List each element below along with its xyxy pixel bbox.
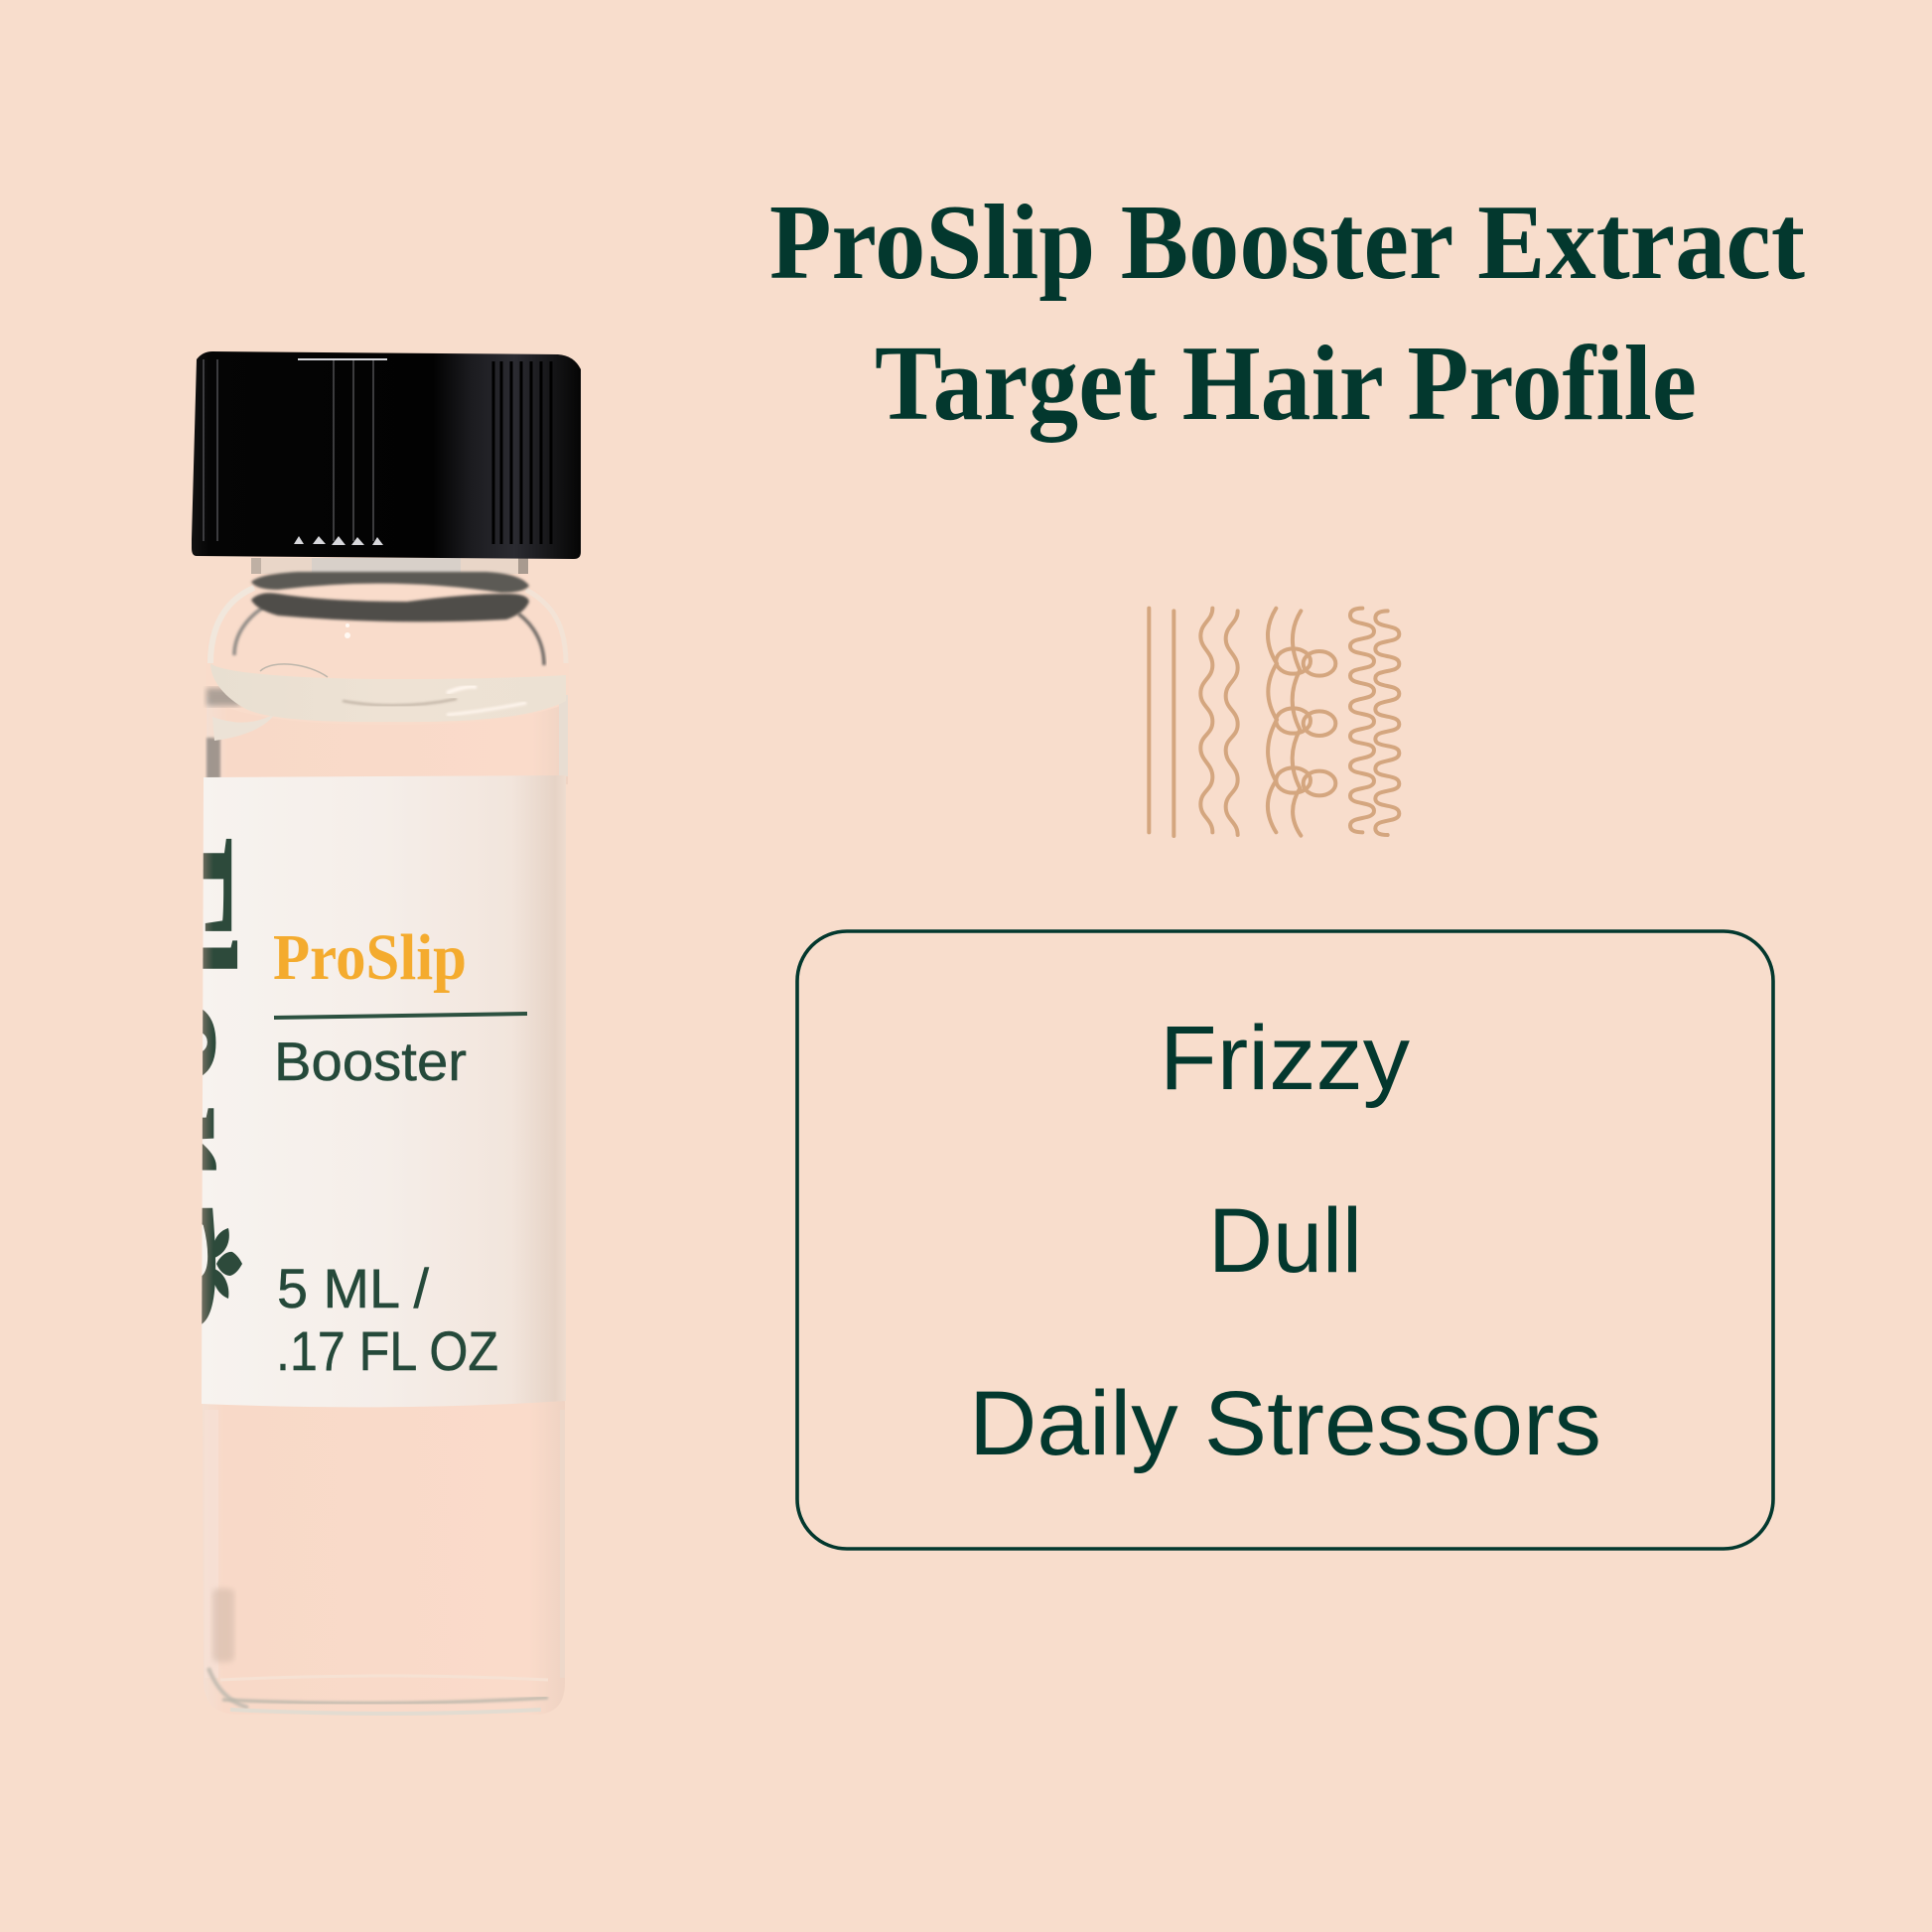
label volume: 5 ML / — [277, 1257, 429, 1319]
vertical brand wordmark: o — [96, 995, 289, 1090]
wavy hair — [1200, 609, 1238, 835]
cap ribs — [204, 359, 373, 541]
label — [202, 775, 566, 1408]
black screw cap — [192, 351, 581, 559]
infographic canvas — [192, 204, 1805, 1716]
cap highlights — [294, 358, 387, 545]
panel: hair concerns — [797, 931, 1773, 1549]
vertical brand wordmark: l — [101, 937, 266, 979]
vertical brand wordmark: a — [96, 1178, 289, 1347]
label product name: ProSlip — [273, 921, 467, 994]
concern list: Frizzy — [1160, 1008, 1410, 1109]
concern list: Dull — [1208, 1190, 1362, 1292]
icon: hair types — [1149, 609, 1399, 836]
label rule — [274, 1014, 527, 1018]
liquid and glass above label — [207, 688, 568, 784]
leaf emblem — [213, 1228, 242, 1299]
vertical brand wordmark: F — [101, 836, 266, 939]
label volume — [276, 1257, 498, 1382]
vial lower body with liquid — [203, 1395, 565, 1715]
vertical brand wordmark: r — [96, 1104, 289, 1173]
label volume: .17 FL OZ — [276, 1319, 498, 1382]
title: ProSlip Booster Extract — [769, 184, 1805, 302]
concern list: Daily Stressors — [969, 1373, 1601, 1474]
panel border — [797, 931, 1773, 1549]
straight hair — [1149, 609, 1173, 836]
cap ribs right — [493, 361, 551, 544]
concern list — [969, 1008, 1601, 1474]
curly hair — [1268, 609, 1335, 836]
coily hair — [1350, 609, 1399, 835]
title — [769, 184, 1805, 443]
title: Target Hair Profile — [875, 325, 1697, 443]
product photo: vial — [192, 351, 581, 1716]
vertical brand wordmark — [202, 838, 238, 1324]
liquid meniscus band — [210, 663, 566, 722]
label paper — [202, 775, 566, 1407]
vial glass neck and shoulder — [206, 556, 569, 784]
label variant: Booster — [274, 1031, 467, 1092]
